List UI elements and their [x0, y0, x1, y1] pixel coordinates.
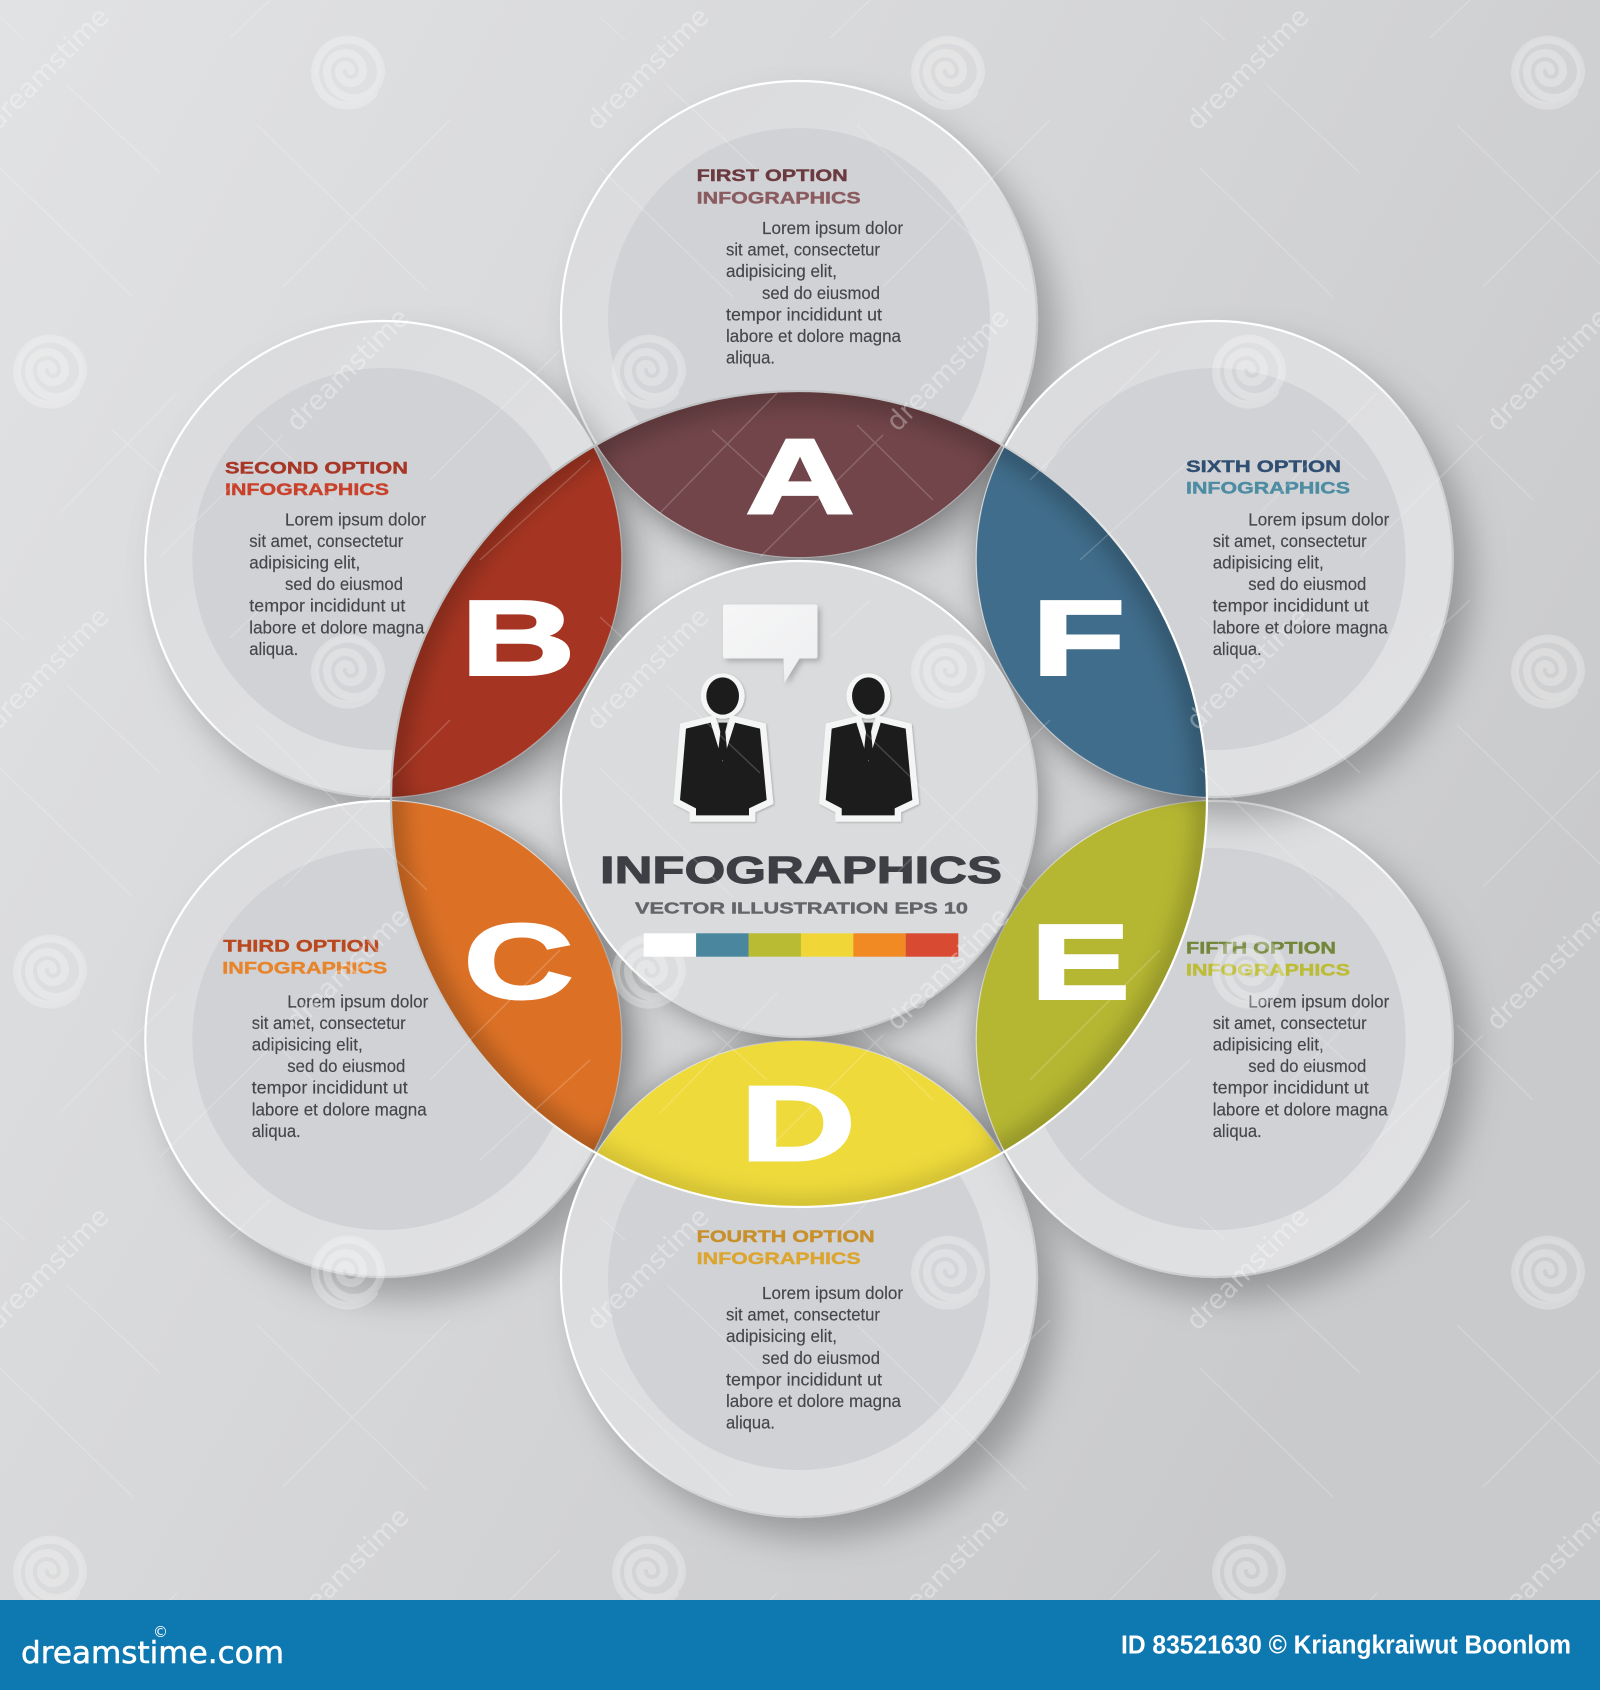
big ring edge [391, 391, 1207, 1207]
text: fourth option [697, 1228, 903, 1433]
text: sixth option: SIXTH OPTION [1186, 458, 1341, 476]
text: fifth option: Lorem ipsum dolor [1248, 991, 1389, 1011]
lens E [964, 794, 1206, 1154]
letter F: F [1032, 580, 1125, 698]
watermark overlay: dreamstime [1180, 1, 1316, 137]
watermark overlay: dreamstime [580, 1201, 716, 1337]
watermark overlay: dreamstime [880, 901, 1016, 1037]
text: fourth option: sed do eiusmod [762, 1348, 880, 1368]
icon: right businessman [826, 673, 912, 815]
text: second option: aliqua. [249, 639, 298, 659]
text: fifth option: sit amet, consectetur [1213, 1013, 1367, 1033]
watermark overlay: dreamstime [1180, 601, 1316, 737]
footer credit: ID 83521630 © Kriangkraiwut Boonlom [1121, 1632, 1571, 1660]
text: first option: sit amet, consectetur [726, 240, 880, 260]
letter B: B [461, 580, 575, 698]
text: first option: FIRST OPTION [697, 167, 848, 185]
text: fifth option: aliqua. [1213, 1121, 1262, 1141]
text: third option: sed do eiusmod [287, 1056, 405, 1076]
text: first option: INFOGRAPHICS [697, 189, 861, 207]
subheading: VECTOR ILLUSTRATION EPS 10 [635, 900, 968, 918]
text: third option: aliqua. [252, 1121, 301, 1141]
watermark overlay: dreamstime [580, 1, 716, 137]
panel: third option petal [145, 801, 621, 1277]
text: second option: labore et dolore magna [249, 617, 425, 637]
text: sixth option: tempor incididunt ut [1213, 596, 1369, 616]
text: third option: tempor incididunt ut [252, 1078, 408, 1098]
text: third option: sit amet, consectetur [252, 1013, 406, 1033]
icon: left businessman [680, 673, 767, 815]
letter D: D [740, 1065, 855, 1183]
heading: INFOGRAPHICS: INFOGRAPHICS [600, 850, 1002, 892]
text: sixth option: adipisicing elit, [1213, 552, 1324, 572]
text: fourth option: labore et dolore magna [726, 1391, 901, 1411]
panel: centre circle [561, 561, 1037, 1037]
text: second option [225, 459, 426, 659]
text: third option: THIRD OPTION [223, 938, 379, 956]
text: fifth option: tempor incididunt ut [1213, 1078, 1369, 1098]
text: third option: Lorem ipsum dolor [287, 991, 428, 1011]
watermark overlay: dreamstime [280, 302, 416, 438]
panel: fifth option petal [977, 801, 1453, 1277]
lens letters [461, 418, 1130, 1183]
text: fourth option: Lorem ipsum dolor [762, 1283, 903, 1303]
centre circle shadow [561, 561, 1037, 1037]
text: sixth option: Lorem ipsum dolor [1248, 509, 1389, 529]
text: fourth option: sit amet, consectetur [726, 1305, 880, 1325]
colour bar [644, 933, 958, 957]
text: fourth option: adipisicing elit, [726, 1326, 837, 1346]
text: second option: adipisicing elit, [249, 552, 360, 572]
text: second option: tempor incididunt ut [249, 596, 405, 616]
text: first option: sed do eiusmod [762, 283, 880, 303]
watermark overlay: dreamstime [880, 302, 1016, 438]
panel: sixth option petal [977, 321, 1453, 797]
panel: first option petal [561, 81, 1037, 557]
text: third option: adipisicing elit, [252, 1034, 363, 1054]
text: fifth option: INFOGRAPHICS [1186, 961, 1350, 979]
text: sixth option: INFOGRAPHICS [1186, 479, 1350, 497]
text: fourth option: tempor incididunt ut [726, 1369, 882, 1389]
lens C [392, 793, 632, 1152]
panel: fourth option petal [561, 1041, 1037, 1517]
text: second option: INFOGRAPHICS [225, 481, 389, 499]
text: first option: Lorem ipsum dolor [762, 218, 903, 238]
lens A [594, 392, 1004, 564]
footer logo text: dreamstime.com [21, 1636, 284, 1671]
text: third option [222, 938, 428, 1141]
text: fifth option: sed do eiusmod [1248, 1056, 1366, 1076]
text: second option: sed do eiusmod [285, 574, 403, 594]
text: first option: adipisicing elit, [726, 261, 837, 281]
text: first option: tempor incididunt ut [726, 304, 882, 324]
text: first option: aliqua. [726, 348, 775, 368]
text: third option: labore et dolore magna [252, 1099, 427, 1119]
text: third option: INFOGRAPHICS [222, 959, 387, 977]
letter C: C [464, 903, 573, 1021]
watermark overlay: dreamstime [280, 1501, 416, 1637]
text: second option: sit amet, consectetur [249, 531, 403, 551]
text: second option: Lorem ipsum dolor [285, 509, 426, 529]
icon: speech bubble [723, 604, 818, 682]
text: sixth option: sit amet, consectetur [1213, 531, 1367, 551]
text: fifth option [1186, 940, 1389, 1141]
panel: second option petal [145, 321, 621, 797]
text: sixth option: sed do eiusmod [1248, 574, 1366, 594]
watermark overlay: dreamstime [880, 1501, 1016, 1637]
text: fourth option: FOURTH OPTION [697, 1228, 875, 1246]
watermark overlay: dreamstime [280, 901, 416, 1037]
watermark overlay: dreamstime [1180, 1201, 1316, 1337]
lens B [392, 446, 632, 805]
text: fourth option: INFOGRAPHICS [697, 1250, 861, 1268]
text: fourth option: aliqua. [726, 1413, 775, 1433]
text: first option [697, 167, 903, 368]
letter A: A [746, 418, 854, 536]
text: second option: SECOND OPTION [225, 459, 408, 477]
coloured lens ring [392, 392, 1206, 1206]
text: sixth option: aliqua. [1213, 639, 1262, 659]
text: first option: labore et dolore magna [726, 326, 901, 346]
footer band [0, 1600, 1600, 1690]
letter E: E [1031, 904, 1130, 1022]
watermark overlay: dreamstime [580, 601, 716, 737]
text: sixth option [1186, 458, 1389, 659]
lens F [964, 446, 1206, 806]
text: fifth option: adipisicing elit, [1213, 1034, 1324, 1054]
footer logo copyright mark: © [153, 1623, 168, 1641]
text: fifth option: labore et dolore magna [1213, 1099, 1388, 1119]
lens D [593, 1034, 1004, 1206]
text: fifth option: FIFTH OPTION [1186, 940, 1336, 958]
text: sixth option: labore et dolore magna [1213, 617, 1388, 637]
